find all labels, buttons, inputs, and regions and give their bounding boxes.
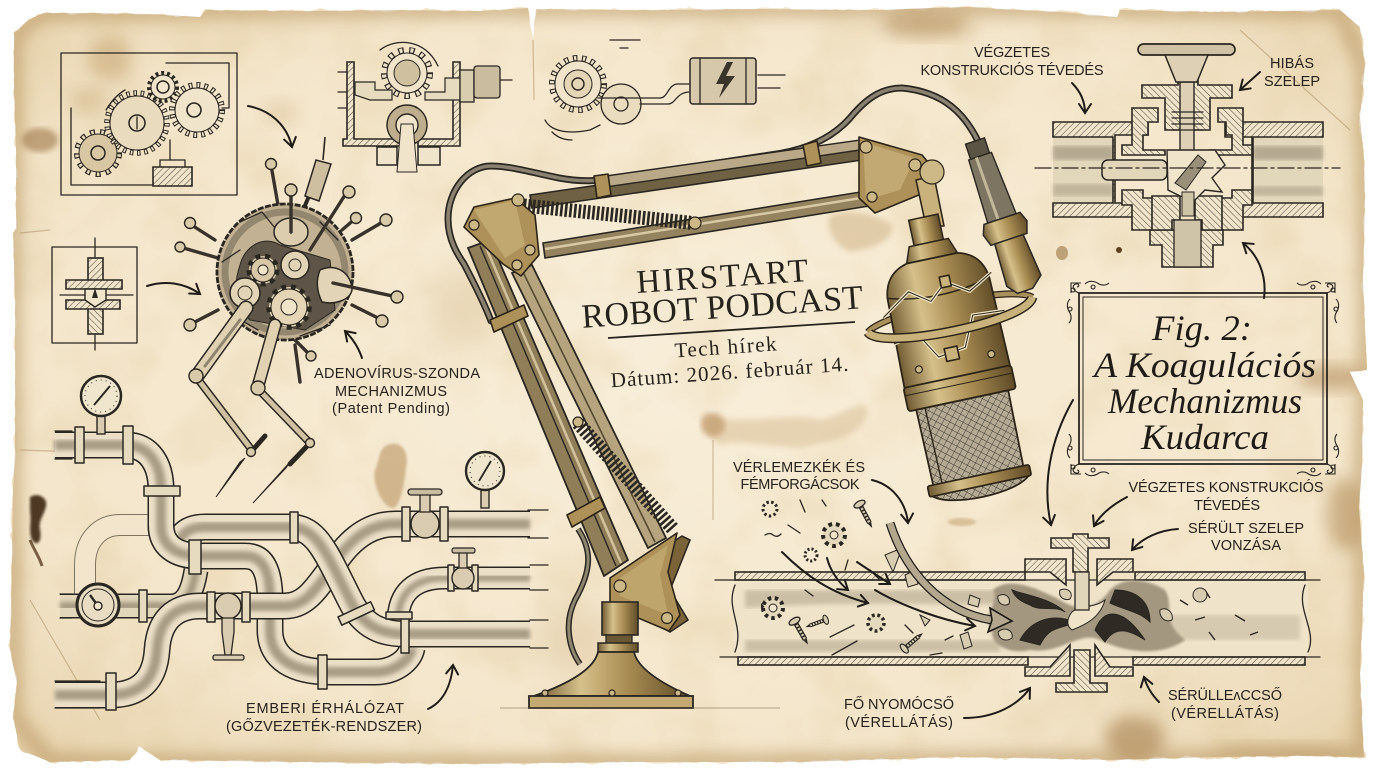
title block <box>580 253 864 392</box>
caption text: Kudarca <box>1140 417 1269 457</box>
debris <box>763 499 980 655</box>
label: platelets and metal shavings: FÉMFORGÁCSOK <box>740 476 860 493</box>
arrow: valve box to virus <box>147 283 200 294</box>
upper spring <box>519 205 693 223</box>
gear left <box>77 132 119 174</box>
caption text: Mechanizmus <box>1107 381 1302 421</box>
neck <box>909 214 943 246</box>
ring front <box>868 297 1036 348</box>
label: design error bottom: VÉGZETES KONSTRUKCIÓS <box>1128 479 1324 496</box>
vessel walls <box>735 572 1025 580</box>
flanges <box>75 426 478 710</box>
icon: upper right valve <box>408 489 442 538</box>
broken chamber <box>1167 150 1225 200</box>
grille <box>916 390 1025 487</box>
base joint plate <box>614 536 690 632</box>
top flange <box>1142 80 1232 130</box>
band <box>903 365 1016 412</box>
label: platelets and metal shavings: VÉRLEMEZKÉK ÉS <box>733 459 865 476</box>
label: faulty valve: HIBÁS <box>1270 55 1314 72</box>
pipe interiors <box>1053 137 1115 203</box>
body <box>879 247 1010 390</box>
label: platelets and metal shavings <box>733 459 865 493</box>
arrow: design error bottom <box>1094 497 1127 526</box>
shock mount <box>879 271 1011 367</box>
label: faulty valve: SZELEP <box>1264 74 1320 90</box>
label: adenovirus probe <box>314 365 480 417</box>
spring <box>1172 112 1203 130</box>
pipe walls and body <box>1053 122 1148 217</box>
arrow: gears to virus <box>248 106 292 147</box>
connector plug <box>954 133 1048 298</box>
vessel interior <box>734 580 1308 657</box>
upper arm rods <box>530 147 862 208</box>
diagram: blood vessel with clot <box>715 499 1320 692</box>
label: main pressure pipe: (VÉRELLÁTÁS) <box>845 714 953 731</box>
illustration: microphone <box>847 133 1071 513</box>
grille bottom <box>931 475 1032 507</box>
plug <box>1102 160 1167 180</box>
inner gear lower <box>269 287 309 327</box>
title block: ROBOT PODCAST <box>580 279 864 336</box>
caption text: Fig. 2: <box>1151 308 1252 348</box>
handle <box>1138 44 1235 55</box>
icon: middle right valve <box>452 548 475 589</box>
sphere <box>217 204 353 340</box>
title block: Tech hírek <box>674 331 778 363</box>
top valve <box>1025 534 1133 610</box>
lower stepped body <box>1150 230 1223 267</box>
main pipes <box>55 445 530 695</box>
label: damaged valve: VONZÁSA <box>1211 537 1281 554</box>
arrow: platelets label <box>872 480 908 523</box>
legs <box>197 308 309 464</box>
label: design error top: KONSTRUKCIÓS TÉVEDÉS <box>920 62 1104 79</box>
support post <box>916 176 944 226</box>
caption text: A Koagulációs <box>1092 345 1316 385</box>
label: design error top: VÉGZETES <box>974 44 1050 61</box>
label: faulty valve <box>1264 55 1320 90</box>
label: vascular network: (GŐZVEZETÉK-RENDSZER) <box>226 718 422 735</box>
label: damaged pipe: (VÉRELLÁTÁS) <box>1171 705 1279 722</box>
label: damaged pipe <box>1168 686 1282 722</box>
label: damaged valve <box>1188 519 1304 554</box>
label: damaged pipe: SÉRÜLLEʌCCSŐ <box>1168 686 1282 704</box>
diagram: gear train box <box>61 53 237 195</box>
stubs <box>55 431 548 708</box>
label: main pressure pipe <box>844 696 954 731</box>
icon: gauge left <box>77 584 119 626</box>
left plate <box>464 198 539 276</box>
lower clamps <box>490 305 528 332</box>
label: design error bottom: TÉVEDÉS <box>1194 497 1260 514</box>
spikes <box>175 137 392 382</box>
clamps <box>594 174 611 198</box>
icon: gauge top left <box>81 376 121 434</box>
label: damaged valve: SÉRÜLT SZELEP <box>1188 519 1304 537</box>
bottom valve <box>1025 645 1133 692</box>
arrow: network label to pipes <box>428 665 453 709</box>
diagram: motor and battery sketch <box>545 40 785 140</box>
caption text <box>1092 308 1316 457</box>
illustration: adenovirus probe <box>175 137 403 503</box>
ornaments <box>1067 281 1339 476</box>
label: adenovirus probe: MECHANIZMUS <box>335 384 447 400</box>
arrow: damaged pipe <box>1144 677 1159 702</box>
label: adenovirus probe: ADENOVÍRUS-SZONDA <box>314 365 480 382</box>
arrows: debris flow <box>782 523 1012 632</box>
arrow: damaged valve <box>1132 529 1178 550</box>
cable behind arm <box>448 88 978 321</box>
illustration: microphone boom arm <box>448 88 978 708</box>
column <box>602 602 638 635</box>
label: design error bottom <box>1128 479 1324 514</box>
illustration: pipe network <box>55 426 548 710</box>
inner gear upper <box>249 256 277 284</box>
icon: valve on lower pipes <box>213 593 244 660</box>
label: main pressure pipe: FŐ NYOMÓCSŐ <box>844 696 954 713</box>
title block: HIRSTART <box>635 253 809 301</box>
diagram: faulty valve cross section <box>1035 44 1340 267</box>
gear big <box>107 93 167 153</box>
title block: Dátum: 2026. február 14. <box>610 352 849 392</box>
label: design error top <box>920 44 1104 79</box>
icon: gauge right <box>466 452 504 508</box>
arrow: main pressure pipe <box>964 688 1030 718</box>
lower arm bars <box>468 240 628 576</box>
label: adenovirus probe: (Patent Pending) <box>332 401 450 417</box>
faded pipes <box>60 525 196 610</box>
arrow: label to virus <box>345 331 362 358</box>
label: vascular network <box>226 700 422 735</box>
diagram: valve cross section box <box>52 238 137 350</box>
lower cable <box>569 529 588 664</box>
gear top small <box>149 73 177 101</box>
label: vascular network: EMBERI ÉRHÁLÓZAT <box>246 700 404 717</box>
panel: figure caption box <box>1067 281 1339 476</box>
gear right <box>172 85 222 135</box>
arrow: figure box to valve <box>1243 243 1265 298</box>
lower spring <box>578 423 673 529</box>
right plate <box>859 137 938 213</box>
diagram: bracket mechanism <box>338 42 512 172</box>
arrow: faulty valve <box>1240 72 1260 90</box>
arrow: figure box to clot <box>1047 400 1073 525</box>
arrow: design error to pipe <box>1072 83 1085 113</box>
bell base <box>534 652 690 696</box>
ring back <box>865 285 1032 332</box>
clot <box>988 581 1185 651</box>
